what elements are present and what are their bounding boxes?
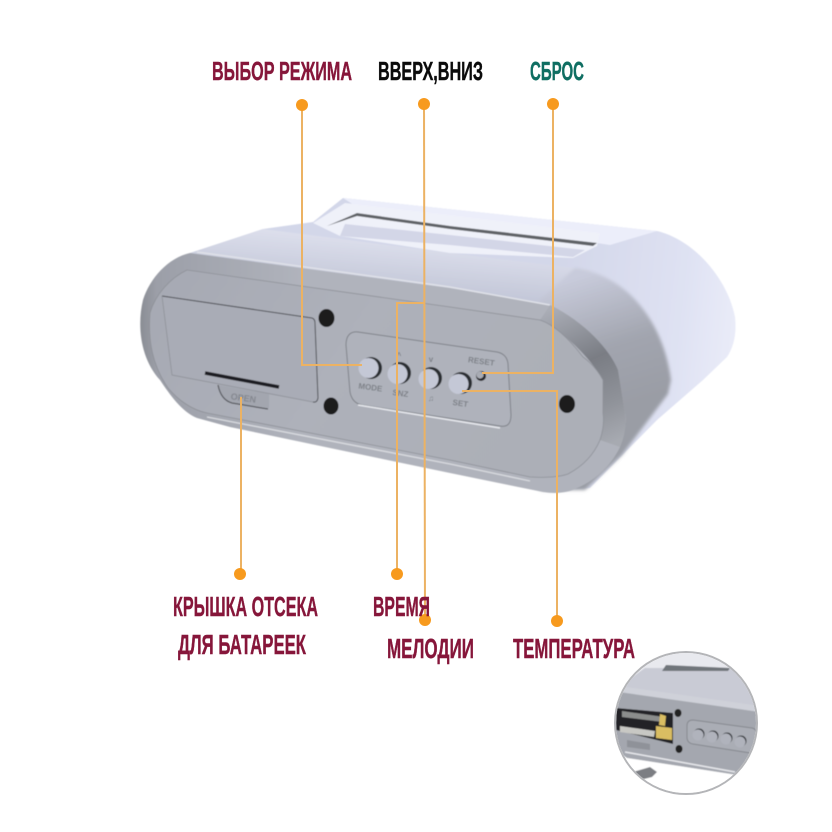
button captions (358, 351, 495, 409)
open latch tab (218, 385, 269, 409)
button captions: RESET (468, 355, 495, 368)
button captions: SNZ (392, 388, 409, 399)
callout line: reset (482, 98, 559, 373)
button captions: ♫ (428, 394, 434, 403)
callout line: mode (296, 99, 362, 365)
callout line: time (391, 303, 425, 580)
infographic canvas (140, 62, 758, 795)
top edge highlight (197, 252, 550, 305)
label: melodies: МЕЛОДИИ (387, 633, 474, 664)
label: battery cover line one: КРЫШКА ОТСЕКА (173, 591, 318, 622)
highlight along bottom edge (207, 417, 530, 481)
label: time: ВРЕМЯ (373, 591, 430, 622)
callout line: temperature (462, 391, 563, 627)
front face inner plate (150, 270, 604, 477)
label: reset: СБРОС (530, 56, 584, 86)
button panel (346, 332, 511, 426)
button captions: ^ (397, 351, 402, 360)
screws (318, 309, 575, 414)
grey side of body (540, 268, 671, 490)
darker rim band at right (540, 305, 626, 447)
label: temperature: ТЕМПЕРАТУРА (513, 633, 635, 664)
buttons (358, 357, 472, 394)
label: mode select: ВЫБОР РЕЖИМА (212, 56, 352, 86)
inset: open battery compartment (610, 650, 760, 800)
open latch tab: OPEN (230, 391, 257, 405)
clock device photo (140, 198, 736, 493)
callout line: battery cover (234, 397, 246, 580)
button captions: MODE (358, 381, 384, 394)
label: battery cover line two: ДЛЯ БАТАРЕЕК (178, 629, 307, 660)
battery door slot (205, 373, 279, 387)
label: up, down: ВВЕРХ,ВНИЗ (378, 56, 483, 86)
reset hole (476, 371, 486, 381)
callout line: up and down, melodies (418, 98, 431, 626)
display recess (313, 203, 600, 258)
body silhouette (190, 198, 736, 492)
battery compartment door (162, 296, 318, 402)
back top strip (343, 198, 657, 245)
button captions: v (429, 355, 434, 364)
front face rim (140, 253, 626, 493)
button captions: SET (452, 398, 469, 409)
sloped top of body (190, 229, 600, 305)
